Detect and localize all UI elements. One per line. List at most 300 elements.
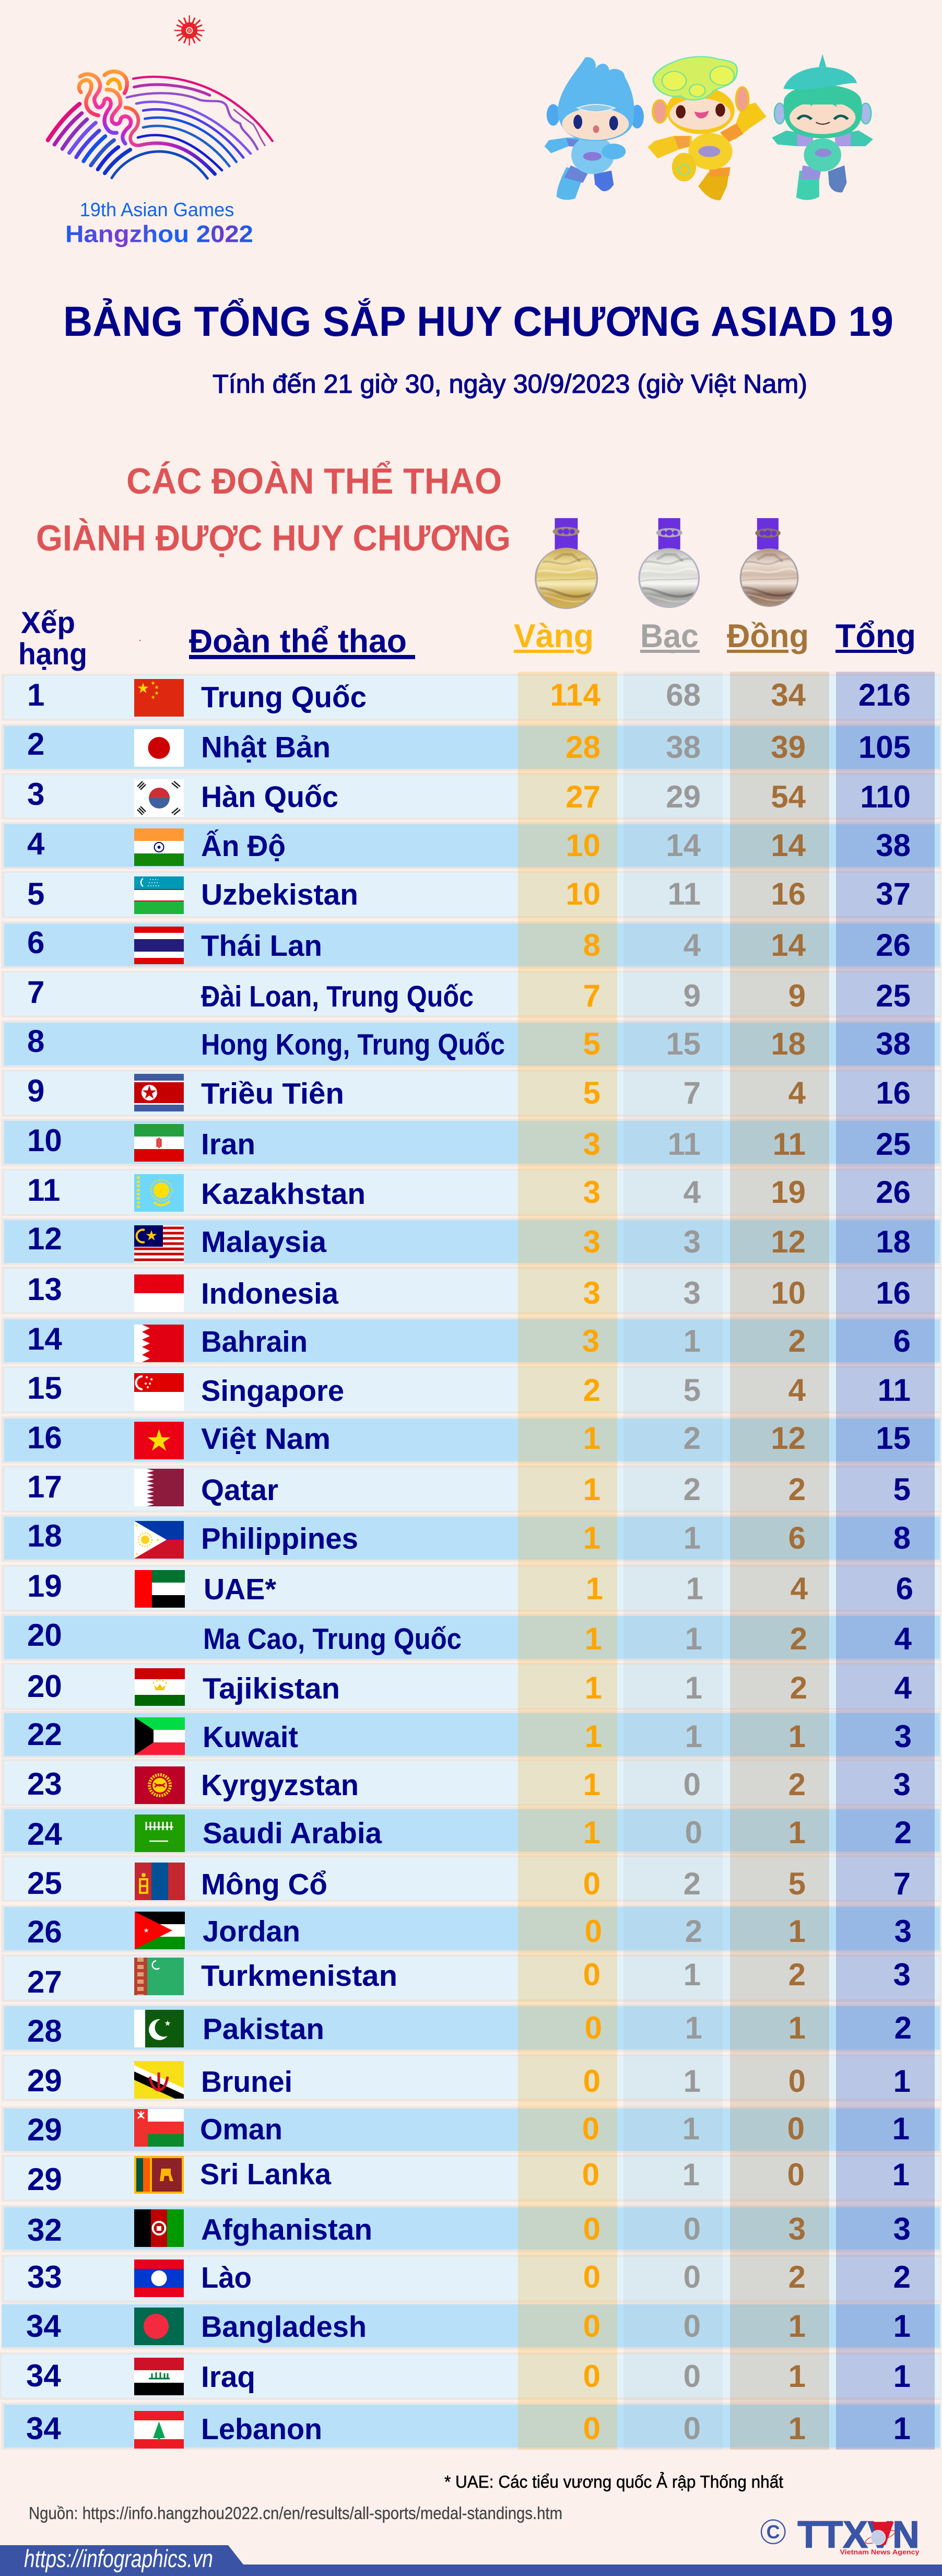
row 22: Kuwait: 1 bbox=[788, 1719, 806, 1754]
row 5: Uzbekistan: 37 bbox=[876, 876, 911, 911]
row 17: Qatar: 2 bbox=[788, 1472, 806, 1507]
row 27: Turkmenistan: 2 bbox=[788, 1957, 806, 1992]
flag: Iran bbox=[134, 1124, 184, 1162]
illustration: three mascots bbox=[545, 54, 873, 200]
row 32: Afghanistan: 0 bbox=[583, 2211, 600, 2246]
row 20: Ma Cao, Trung Quốc: 1 bbox=[585, 1621, 602, 1656]
row 4: Ấn Độ: 14 bbox=[666, 828, 701, 863]
row 34: Bangladesh: Bangladesh bbox=[201, 2310, 367, 2344]
row 6: Thái Lan: Thái Lan bbox=[201, 929, 322, 963]
row 6: Thái Lan: 26 bbox=[876, 928, 911, 963]
row 29: Brunei: 1 bbox=[893, 2064, 911, 2099]
row 29: Brunei bbox=[2, 2055, 941, 2101]
row 8: Hong Kong, Trung Quốc: 38 bbox=[876, 1026, 911, 1061]
row 33: Lào: 2 bbox=[893, 2259, 911, 2294]
row 27: Turkmenistan: 3 bbox=[893, 1957, 911, 1992]
mascot: yellow bbox=[647, 57, 767, 200]
flag: Turkmenistan bbox=[134, 1958, 184, 1995]
row 16: Việt Nam: 15 bbox=[876, 1421, 911, 1456]
row 29: Brunei: 29 bbox=[27, 2063, 62, 2098]
row 17: Qatar: 5 bbox=[893, 1472, 911, 1507]
flag: Saudi Arabia bbox=[135, 1814, 185, 1852]
row 29: Brunei: 0 bbox=[583, 2064, 600, 2099]
row 5: Uzbekistan: 16 bbox=[771, 876, 806, 911]
row 5: Uzbekistan: Uzbekistan bbox=[201, 878, 358, 911]
row 13: Indonesia: 3 bbox=[684, 1275, 701, 1310]
row 28: Pakistan: 0 bbox=[585, 2010, 602, 2045]
row 27: Turkmenistan: 27 bbox=[27, 1964, 62, 1999]
row 3: Hàn Quốc: 54 bbox=[771, 779, 806, 814]
header: Xếp hạng: Xếp bbox=[21, 606, 75, 640]
row 22: Kuwait: 22 bbox=[27, 1717, 62, 1752]
row 17: Qatar bbox=[2, 1466, 941, 1513]
tagline: Vietnam News Agency bbox=[840, 2549, 920, 2556]
flag: Qatar bbox=[134, 1469, 184, 1506]
row 7: Đài Loan, Trung Quốc: 9 bbox=[788, 978, 806, 1013]
row 26: Jordan: 2 bbox=[685, 1914, 702, 1949]
row 3: Hàn Quốc: Hàn Quốc bbox=[201, 780, 338, 814]
icon: copyright: C bbox=[767, 2521, 780, 2543]
row 23: Kyrgyzstan: 3 bbox=[893, 1767, 911, 1802]
row 25: Mông Cổ: 5 bbox=[788, 1866, 806, 1901]
row 31: Sri Lanka: 1 bbox=[892, 2157, 910, 2192]
icon: red sun emblem bbox=[175, 16, 204, 45]
row 27: Turkmenistan bbox=[2, 1954, 941, 2002]
row 21: Tajikistan: 4 bbox=[894, 1670, 912, 1705]
row 23: Kyrgyzstan: 23 bbox=[27, 1766, 62, 1801]
section heading bbox=[36, 460, 511, 558]
row 17: Qatar: 2 bbox=[684, 1472, 701, 1507]
row 20: Ma Cao, Trung Quốc bbox=[2, 1614, 941, 1661]
flag: Oman bbox=[134, 2109, 184, 2147]
row 36: Lebanon: 0 bbox=[684, 2411, 701, 2446]
row 2: Nhật Bản: 2 bbox=[27, 727, 44, 762]
row 21: Tajikistan: 2 bbox=[790, 1670, 807, 1705]
row 7: Đài Loan, Trung Quốc: 9 bbox=[684, 978, 701, 1013]
row 15: Singapore: 2 bbox=[583, 1373, 600, 1408]
row 20: Ma Cao, Trung Quốc: 2 bbox=[790, 1621, 807, 1656]
row 4: Ấn Độ: 4 bbox=[27, 826, 45, 861]
row 35: Iraq: 0 bbox=[583, 2359, 600, 2394]
row 10: Iran: 3 bbox=[583, 1127, 600, 1162]
row 35: Iraq bbox=[0, 2352, 941, 2400]
row 5: Uzbekistan: 11 bbox=[668, 876, 701, 911]
row 15: Singapore: Singapore bbox=[201, 1374, 344, 1408]
row 3: Hàn Quốc: 3 bbox=[27, 777, 44, 812]
flag: Lebanon bbox=[134, 2411, 184, 2449]
row 1: Trung Quốc: 34 bbox=[771, 677, 806, 712]
row 1: Trung Quốc: Trung Quốc bbox=[201, 681, 367, 714]
row 33: Lào: Lào bbox=[201, 2261, 252, 2294]
graphic: wave arcs bbox=[48, 72, 273, 179]
row 29: Brunei: Brunei bbox=[201, 2065, 292, 2099]
row 12: Malaysia: 3 bbox=[583, 1224, 600, 1259]
row 34: Bangladesh: 1 bbox=[893, 2309, 911, 2344]
flag: UAE bbox=[135, 1570, 185, 1608]
row 10: Iran: 10 bbox=[27, 1123, 62, 1158]
row 19: UAE: 1 bbox=[686, 1571, 703, 1606]
row 25: Mông Cổ bbox=[2, 1855, 941, 1902]
row 1: Trung Quốc: 1 bbox=[27, 677, 44, 712]
row 11: Kazakhstan: 19 bbox=[771, 1175, 806, 1210]
row 12: Malaysia: 12 bbox=[27, 1221, 62, 1256]
medals bbox=[535, 518, 798, 609]
row 28: Pakistan: 1 bbox=[685, 2010, 702, 2045]
flag: Afghanistan bbox=[134, 2209, 184, 2247]
footnote: UAE: * UAE: Các tiểu vương quốc Ả rập Thống nhất bbox=[444, 2472, 783, 2491]
row 29: Brunei: 0 bbox=[788, 2064, 806, 2099]
row 33: Lào bbox=[2, 2255, 941, 2303]
flag: Thailand bbox=[134, 927, 184, 964]
flag: Pakistan bbox=[134, 2010, 184, 2047]
row 34: Bangladesh: 34 bbox=[26, 2309, 61, 2344]
row 2: Nhật Bản: 38 bbox=[666, 730, 701, 765]
row 28: Pakistan: Pakistan bbox=[203, 2012, 324, 2046]
row 26: Jordan: 0 bbox=[585, 1914, 602, 1949]
row 27: Turkmenistan: Turkmenistan bbox=[201, 1959, 397, 1993]
row 30: Oman: 29 bbox=[27, 2112, 62, 2147]
row 35: Iraq: 1 bbox=[893, 2359, 911, 2394]
row 21: Tajikistan bbox=[2, 1663, 941, 1710]
row 19: UAE: 19 bbox=[27, 1568, 62, 1603]
row 4: Ấn Độ bbox=[2, 822, 941, 869]
row 7: Đài Loan, Trung Quốc: 7 bbox=[27, 975, 44, 1010]
medal: bronze bbox=[740, 518, 798, 607]
row 11: Kazakhstan: 26 bbox=[876, 1175, 911, 1210]
row 11: Kazakhstan: 3 bbox=[583, 1175, 600, 1210]
row 11: Kazakhstan: 11 bbox=[27, 1173, 60, 1208]
header: Đoàn thể thao: Đoàn thể thao bbox=[189, 623, 407, 660]
flag: Kazakhstan bbox=[134, 1174, 184, 1212]
row 33: Lào: 33 bbox=[27, 2259, 62, 2294]
row 1: Trung Quốc: 68 bbox=[666, 677, 701, 712]
row 7: Đài Loan, Trung Quốc: Đài Loan, Trung Quốc bbox=[201, 980, 474, 1013]
row 32: Afghanistan: 3 bbox=[788, 2211, 806, 2246]
row 21: Tajikistan: 1 bbox=[685, 1670, 702, 1705]
row 24: Saudi Arabia bbox=[2, 1807, 941, 1854]
row 32: Afghanistan: 0 bbox=[684, 2211, 701, 2246]
table header bbox=[18, 606, 916, 671]
row 14: Bahrain: Bahrain bbox=[201, 1325, 308, 1359]
header: Bạc: Bạc bbox=[640, 618, 699, 654]
row 26: Jordan bbox=[2, 1905, 941, 1952]
row 24: Saudi Arabia: Saudi Arabia bbox=[203, 1817, 382, 1850]
row 3: Hàn Quốc: 29 bbox=[666, 779, 701, 814]
row 32: Afghanistan: 32 bbox=[27, 2212, 62, 2247]
row 26: Jordan: Jordan bbox=[203, 1915, 300, 1948]
row 30: Oman: 0 bbox=[582, 2111, 599, 2146]
header: Tổng: Tổng bbox=[835, 618, 916, 654]
row 11: Kazakhstan: Kazakhstan bbox=[201, 1177, 366, 1211]
row 27: Turkmenistan: 1 bbox=[684, 1957, 701, 1992]
row 4: Ấn Độ: 14 bbox=[771, 828, 806, 863]
row 36: Lebanon: 1 bbox=[788, 2411, 806, 2446]
row 6: Thái Lan bbox=[2, 921, 941, 968]
icon: copyright bbox=[761, 2520, 785, 2544]
medal table bbox=[0, 674, 941, 2450]
row 12: Malaysia: Malaysia bbox=[201, 1225, 327, 1259]
flag: Malaysia bbox=[134, 1225, 184, 1263]
row 11: Kazakhstan bbox=[2, 1169, 941, 1216]
row 30: Oman: 1 bbox=[892, 2111, 910, 2146]
row 24: Saudi Arabia: 1 bbox=[788, 1815, 806, 1850]
flag: Japan bbox=[134, 729, 184, 767]
flag: Kuwait bbox=[135, 1717, 185, 1755]
row 18: Philippines: 6 bbox=[788, 1520, 806, 1555]
flag: Uzbekistan bbox=[134, 876, 184, 914]
row 18: Philippines: 1 bbox=[583, 1520, 600, 1555]
row 23: Kyrgyzstan: Kyrgyzstan bbox=[201, 1769, 359, 1802]
row 9: Triều Tiên: 7 bbox=[684, 1075, 701, 1110]
text: Hangzhou 2022: Hangzhou 2022 bbox=[65, 220, 253, 247]
row 23: Kyrgyzstan: 0 bbox=[684, 1767, 701, 1802]
website url: https://infographics.vn bbox=[24, 2545, 213, 2572]
row 20: Ma Cao, Trung Quốc: Ma Cao, Trung Quốc bbox=[203, 1622, 462, 1656]
row 9: Triều Tiên: 16 bbox=[876, 1075, 911, 1110]
row 16: Việt Nam bbox=[2, 1416, 941, 1463]
row 32: Afghanistan: 3 bbox=[893, 2211, 911, 2246]
row 6: Thái Lan: 14 bbox=[771, 928, 806, 963]
medal: gold bbox=[535, 518, 598, 609]
section heading: GIÀNH ĐƯỢC HUY CHƯƠNG bbox=[36, 518, 511, 558]
row 7: Đài Loan, Trung Quốc: 7 bbox=[583, 978, 600, 1013]
row 13: Indonesia: 3 bbox=[583, 1275, 600, 1310]
row 36: Lebanon: 1 bbox=[893, 2411, 911, 2446]
row 9: Triều Tiên bbox=[2, 1070, 941, 1117]
row 5: Uzbekistan bbox=[2, 871, 941, 918]
row 23: Kyrgyzstan bbox=[2, 1759, 941, 1806]
row 16: Việt Nam: 16 bbox=[27, 1420, 62, 1455]
row 2: Nhật Bản: 105 bbox=[858, 730, 911, 765]
row 4: Ấn Độ: Ấn Độ bbox=[201, 829, 286, 863]
row 10: Iran: 11 bbox=[773, 1127, 806, 1162]
row 29: Brunei: 1 bbox=[684, 2064, 701, 2099]
logo: 19th Asian Games Hangzhou 2022 bbox=[48, 16, 273, 247]
row 8: Hong Kong, Trung Quốc: 8 bbox=[27, 1024, 44, 1059]
row 24: Saudi Arabia: 24 bbox=[27, 1817, 62, 1852]
row 7: Đài Loan, Trung Quốc: 25 bbox=[876, 978, 911, 1013]
flag: Brunei bbox=[134, 2061, 184, 2099]
row 24: Saudi Arabia: 2 bbox=[894, 1815, 912, 1850]
row 8: Hong Kong, Trung Quốc: Hong Kong, Trung Quốc bbox=[201, 1028, 505, 1061]
logo: TTXVN bbox=[761, 2513, 920, 2556]
row 8: Hong Kong, Trung Quốc: 18 bbox=[771, 1026, 806, 1061]
flag: China bbox=[134, 679, 184, 717]
row 21: Tajikistan: 20 bbox=[27, 1669, 62, 1704]
row 18: Philippines: 1 bbox=[684, 1520, 701, 1555]
row 12: Malaysia bbox=[2, 1218, 941, 1265]
row 14: Bahrain: 2 bbox=[788, 1324, 806, 1359]
row 25: Mông Cổ: Mông Cổ bbox=[201, 1868, 327, 1901]
flag: Vietnam bbox=[134, 1422, 184, 1459]
flag: Bangladesh bbox=[134, 2308, 184, 2345]
row 30: Oman: 1 bbox=[682, 2111, 700, 2146]
subtitle: date: Tính đến 21 giờ 30, ngày 30/9/2023 (giờ Việt Nam) bbox=[213, 369, 807, 399]
flag: Jordan bbox=[135, 1912, 185, 1949]
row 32: Afghanistan bbox=[2, 2205, 941, 2252]
row 19: UAE: 4 bbox=[791, 1571, 808, 1606]
row 2: Nhật Bản bbox=[2, 724, 941, 771]
row 22: Kuwait: 1 bbox=[585, 1719, 602, 1754]
flag: South Korea bbox=[134, 779, 184, 817]
title: BẢNG TỔNG SẮP HUY CHƯƠNG ASIAD 19 bbox=[63, 298, 893, 345]
row 8: Hong Kong, Trung Quốc: 5 bbox=[583, 1026, 600, 1061]
row 26: Jordan: 1 bbox=[788, 1914, 806, 1949]
row 12: Malaysia: 3 bbox=[684, 1224, 701, 1259]
row 4: Ấn Độ: 38 bbox=[876, 828, 911, 863]
row 31: Sri Lanka bbox=[2, 2155, 941, 2202]
column tints bbox=[518, 672, 935, 2450]
flag: Sri Lanka bbox=[134, 2156, 184, 2194]
row 28: Pakistan: 28 bbox=[27, 2013, 62, 2048]
footer bar bbox=[0, 2545, 942, 2576]
row 34: Bangladesh bbox=[2, 2303, 941, 2349]
row 10: Iran: 11 bbox=[668, 1127, 701, 1162]
row 5: Uzbekistan: 5 bbox=[27, 876, 44, 911]
row 20: Ma Cao, Trung Quốc: 1 bbox=[685, 1621, 702, 1656]
flag: Laos bbox=[134, 2259, 184, 2297]
row 6: Thái Lan: 6 bbox=[27, 925, 44, 960]
row 21: Tajikistan: Tajikistan bbox=[203, 1672, 340, 1705]
row 23: Kyrgyzstan: 2 bbox=[788, 1767, 806, 1802]
row 18: Philippines bbox=[2, 1515, 941, 1562]
row 17: Qatar: 17 bbox=[27, 1469, 62, 1504]
row 2: Nhật Bản: 28 bbox=[566, 730, 600, 765]
row 10: Iran: 25 bbox=[876, 1127, 911, 1162]
row 15: Singapore: 4 bbox=[788, 1373, 806, 1408]
flag: Kyrgyzstan bbox=[135, 1766, 185, 1804]
row 25: Mông Cổ: 7 bbox=[893, 1866, 911, 1901]
row 13: Indonesia: Indonesia bbox=[201, 1277, 339, 1310]
source line: Nguồn: https://info.hangzhou2022.cn/en/results/all-sports/medal-standings.htm bbox=[29, 2503, 562, 2523]
row 14: Bahrain: 14 bbox=[27, 1321, 62, 1356]
row 19: UAE: 6 bbox=[896, 1571, 913, 1606]
row 22: Kuwait bbox=[2, 1711, 941, 1758]
row 10: Iran bbox=[2, 1119, 941, 1166]
row 16: Việt Nam: 2 bbox=[684, 1421, 701, 1456]
row 21: Tajikistan: 1 bbox=[585, 1670, 602, 1705]
row 25: Mông Cổ: 25 bbox=[27, 1866, 62, 1901]
row 6: Thái Lan: 4 bbox=[684, 928, 701, 963]
header: Xếp hạng: hạng bbox=[18, 637, 87, 671]
flag: Tajikistan bbox=[135, 1668, 185, 1706]
row 36: Lebanon: 0 bbox=[583, 2411, 600, 2446]
row 16: Việt Nam: 1 bbox=[583, 1421, 600, 1456]
row 14: Bahrain: 6 bbox=[893, 1324, 911, 1359]
row 11: Kazakhstan: 4 bbox=[684, 1175, 701, 1210]
row 15: Singapore bbox=[2, 1366, 941, 1413]
row 34: Bangladesh: 0 bbox=[583, 2309, 600, 2344]
row 25: Mông Cổ: 2 bbox=[684, 1866, 701, 1901]
row 35: Iraq: 1 bbox=[788, 2359, 806, 2394]
row 19: UAE bbox=[2, 1565, 941, 1612]
row 35: Iraq: 0 bbox=[684, 2359, 701, 2394]
header: Vàng: Vàng bbox=[514, 618, 594, 654]
row 20: Ma Cao, Trung Quốc: 4 bbox=[894, 1621, 912, 1656]
row 22: Kuwait: 3 bbox=[894, 1719, 912, 1754]
row 14: Bahrain bbox=[2, 1317, 941, 1364]
flag: North Korea bbox=[134, 1074, 184, 1111]
row 34: Bangladesh: 1 bbox=[788, 2309, 806, 2344]
row 23: Kyrgyzstan: 1 bbox=[583, 1767, 600, 1802]
row 13: Indonesia bbox=[2, 1267, 941, 1314]
row 19: UAE: 1 bbox=[586, 1571, 603, 1606]
row 3: Hàn Quốc: 27 bbox=[566, 779, 600, 814]
row 3: Hàn Quốc bbox=[2, 773, 941, 819]
row 33: Lào: 2 bbox=[788, 2259, 806, 2294]
row 14: Bahrain: 3 bbox=[582, 1324, 599, 1359]
row 5: Uzbekistan: 10 bbox=[566, 876, 600, 911]
row 28: Pakistan: 2 bbox=[894, 2010, 912, 2045]
row 24: Saudi Arabia: 0 bbox=[685, 1815, 702, 1850]
row 31: Sri Lanka: 0 bbox=[787, 2157, 805, 2192]
row 33: Lào: 0 bbox=[684, 2259, 701, 2294]
flag: Bahrain bbox=[134, 1325, 184, 1362]
row 4: Ấn Độ: 10 bbox=[566, 828, 600, 863]
header: Đồng: Đồng bbox=[727, 618, 809, 654]
wordmark: TTXVN bbox=[797, 2513, 920, 2556]
row 30: Oman: Oman bbox=[200, 2113, 282, 2146]
row 22: Kuwait: 1 bbox=[685, 1719, 702, 1754]
row 14: Bahrain: 1 bbox=[684, 1324, 701, 1359]
flag: Singapore bbox=[134, 1373, 184, 1411]
row 35: Iraq: 34 bbox=[26, 2358, 61, 2393]
row 6: Thái Lan: 8 bbox=[583, 928, 600, 963]
row 3: Hàn Quốc: 110 bbox=[860, 779, 911, 814]
row 10: Iran: Iran bbox=[201, 1128, 255, 1161]
mascot: green bbox=[772, 54, 873, 200]
row 9: Triều Tiên: 4 bbox=[788, 1075, 806, 1110]
row 9: Triều Tiên: Triều Tiên bbox=[201, 1077, 344, 1110]
row 16: Việt Nam: Việt Nam bbox=[201, 1422, 331, 1456]
row 30: Oman bbox=[2, 2106, 941, 2153]
row 9: Triều Tiên: 5 bbox=[583, 1075, 600, 1110]
row 16: Việt Nam: 12 bbox=[771, 1421, 806, 1456]
row 9: Triều Tiên: 9 bbox=[27, 1073, 44, 1108]
mascot: blue bbox=[545, 57, 644, 200]
row 13: Indonesia: 13 bbox=[27, 1272, 62, 1307]
row 32: Afghanistan: Afghanistan bbox=[201, 2213, 372, 2246]
row 2: Nhật Bản: 39 bbox=[771, 730, 806, 765]
flag: Indonesia bbox=[134, 1274, 184, 1312]
row 12: Malaysia: 12 bbox=[771, 1224, 806, 1259]
row 27: Turkmenistan: 0 bbox=[583, 1957, 600, 1992]
flag: India bbox=[134, 828, 184, 866]
row 30: Oman: 0 bbox=[787, 2111, 805, 2146]
row 13: Indonesia: 16 bbox=[876, 1275, 911, 1310]
row 8: Hong Kong, Trung Quốc: 15 bbox=[666, 1026, 701, 1061]
row 1: Trung Quốc: 216 bbox=[858, 677, 911, 712]
row 36: Lebanon bbox=[2, 2403, 941, 2450]
row 18: Philippines: Philippines bbox=[201, 1522, 358, 1555]
row 17: Qatar: 1 bbox=[583, 1472, 600, 1507]
row 15: Singapore: 5 bbox=[684, 1373, 701, 1408]
row 25: Mông Cổ: 0 bbox=[583, 1866, 600, 1901]
section heading: CÁC ĐOÀN THỂ THAO bbox=[126, 460, 502, 501]
row 20: Ma Cao, Trung Quốc: 20 bbox=[27, 1618, 62, 1653]
header: Xếp hạng bbox=[18, 606, 87, 671]
row 35: Iraq: Iraq bbox=[201, 2360, 255, 2394]
row 15: Singapore: 11 bbox=[878, 1373, 911, 1408]
medal: silver bbox=[638, 518, 700, 608]
row 31: Sri Lanka: 29 bbox=[27, 2162, 62, 2197]
row 26: Jordan: 3 bbox=[894, 1914, 912, 1949]
flag: Mongolia bbox=[135, 1863, 185, 1900]
row 1: Trung Quốc: 114 bbox=[550, 677, 601, 712]
row 18: Philippines: 8 bbox=[893, 1520, 911, 1555]
row 28: Pakistan bbox=[2, 2005, 941, 2052]
row 26: Jordan: 26 bbox=[27, 1914, 62, 1949]
